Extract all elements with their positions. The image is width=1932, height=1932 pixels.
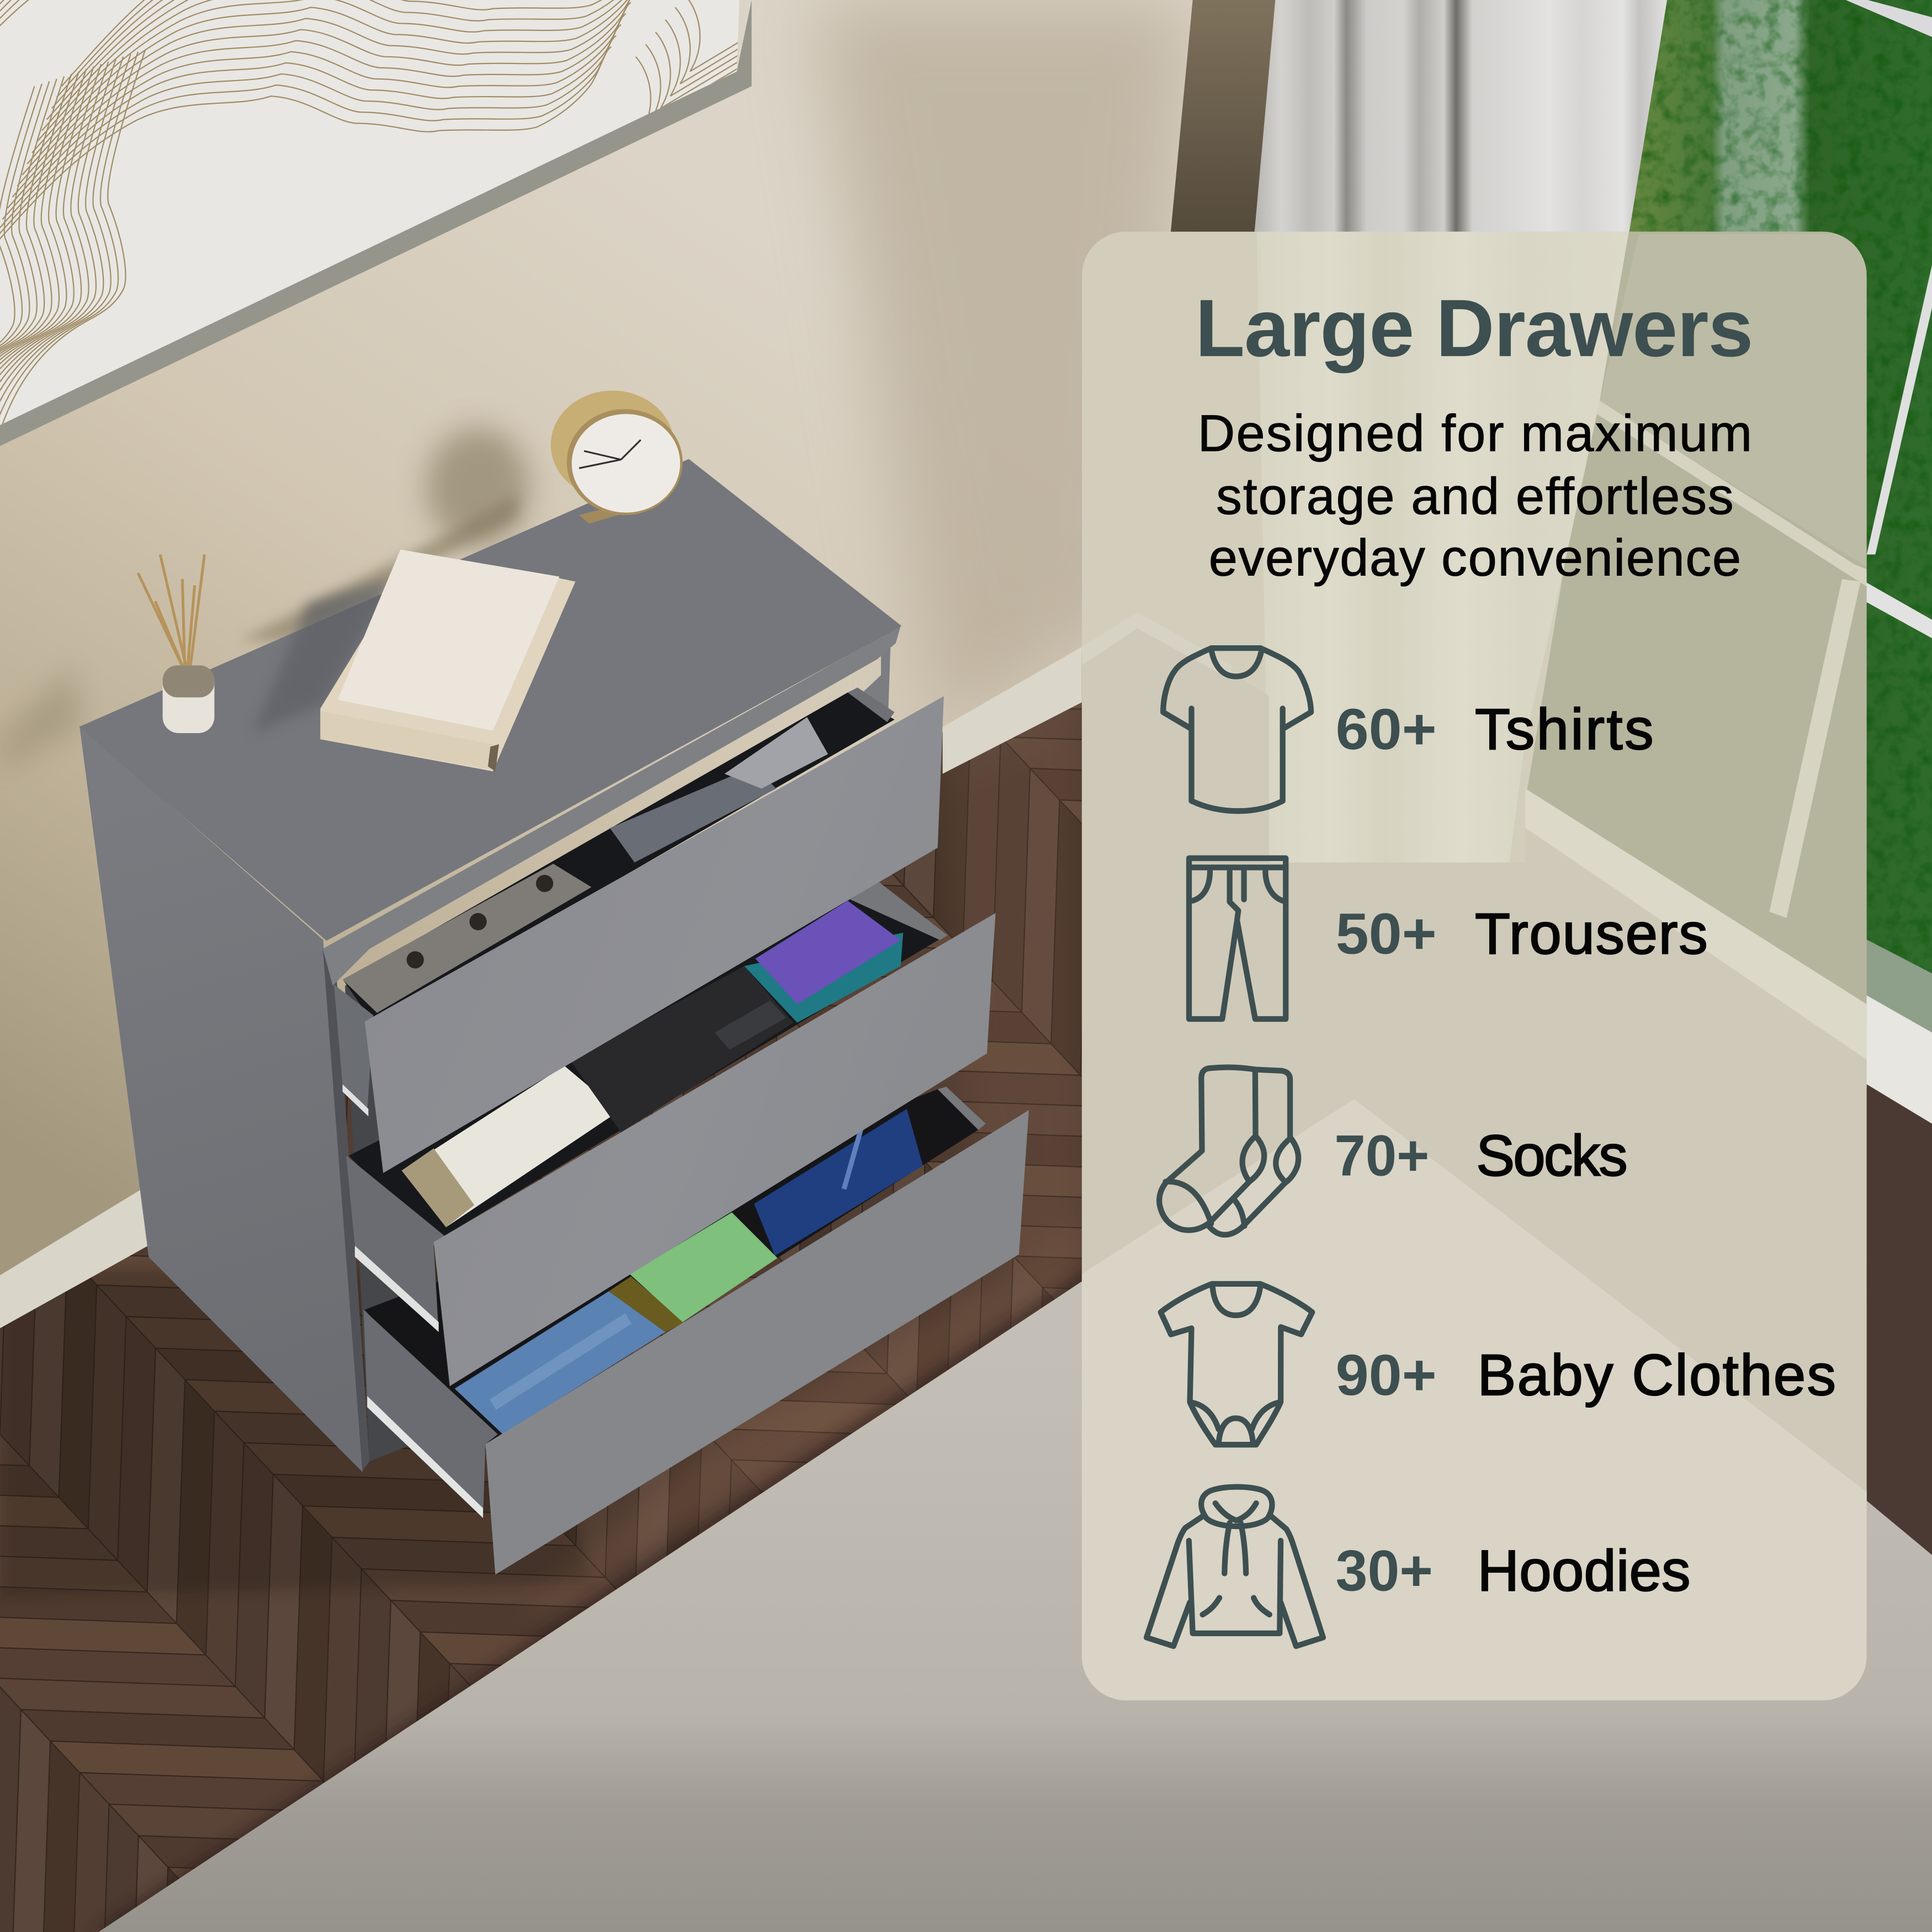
panel tone: grass through window <box>1525 232 1867 1023</box>
count: 70+ <box>1334 1123 1429 1188</box>
cabinet side panel <box>80 727 362 1471</box>
cabinet front edge strip <box>323 949 370 1471</box>
clothes: purple and teal tops <box>744 901 903 1023</box>
background: beige wall <box>0 0 1193 1281</box>
count: 50+ <box>1336 902 1437 967</box>
row: tshirts <box>1163 648 1654 811</box>
panel tone: window mullions and sill <box>1525 400 1867 1060</box>
count: 90+ <box>1336 1343 1437 1408</box>
clothes: white shirt <box>402 1066 619 1227</box>
description: everyday convenience <box>1209 528 1741 586</box>
panel tone: curtain <box>1257 232 1629 863</box>
background: rug <box>89 1089 1932 1932</box>
icon: trousers <box>1189 858 1286 1019</box>
wall art: framed line painting <box>0 0 789 468</box>
panel tone: lower wall and floor <box>1082 612 1867 1700</box>
cabinet top surface <box>80 460 901 986</box>
clothes: knit jumper <box>343 864 591 1013</box>
label: Socks <box>1476 1123 1628 1188</box>
clothes: grey top <box>610 766 776 862</box>
background: curtain <box>1254 0 1667 234</box>
clothes: black garment <box>570 966 794 1132</box>
row: trousers <box>1189 858 1708 1019</box>
icon: hoodie <box>1147 1487 1323 1646</box>
title: Large Drawers <box>1195 283 1753 374</box>
panel: large drawers info card <box>1082 232 1867 1700</box>
clothes: blue jeans <box>455 1291 665 1434</box>
count: 30+ <box>1336 1539 1433 1604</box>
clothes: green top <box>630 1212 777 1322</box>
row: socks <box>1159 1067 1628 1235</box>
label: Baby Clothes <box>1477 1343 1836 1408</box>
table clock <box>551 391 683 524</box>
row: baby clothes <box>1161 1284 1836 1445</box>
book stack <box>320 550 575 771</box>
label: Tshirts <box>1475 697 1654 762</box>
clothes: navy hoodie <box>754 1109 923 1256</box>
row: hoodies <box>1147 1487 1690 1646</box>
icon: baby bodysuit <box>1161 1284 1312 1445</box>
icon: t-shirt <box>1163 648 1311 811</box>
panel background <box>1082 232 1867 1700</box>
icon: socks <box>1159 1067 1298 1235</box>
description: storage and effortless <box>1216 467 1734 525</box>
background: skirting boards <box>0 647 1082 1328</box>
clothes: grey sock <box>724 717 828 789</box>
drawer 3 <box>363 1087 1029 1575</box>
description <box>1198 404 1752 586</box>
reed diffuser <box>138 554 214 733</box>
panel tone: rug <box>1082 1099 1867 1700</box>
drawer 1 <box>334 688 944 1173</box>
chest of drawers <box>0 391 1029 1575</box>
description: Designed for maximum <box>1198 404 1752 462</box>
drawer 2 <box>346 880 996 1386</box>
label: Trousers <box>1475 902 1708 967</box>
cast shadows on wall <box>0 428 530 770</box>
background: window with grass <box>1626 0 1932 1555</box>
background: side wall <box>1171 0 1281 234</box>
label: Hoodies <box>1477 1539 1690 1604</box>
count: 60+ <box>1336 697 1437 762</box>
cabinet dark interior <box>345 973 419 1461</box>
